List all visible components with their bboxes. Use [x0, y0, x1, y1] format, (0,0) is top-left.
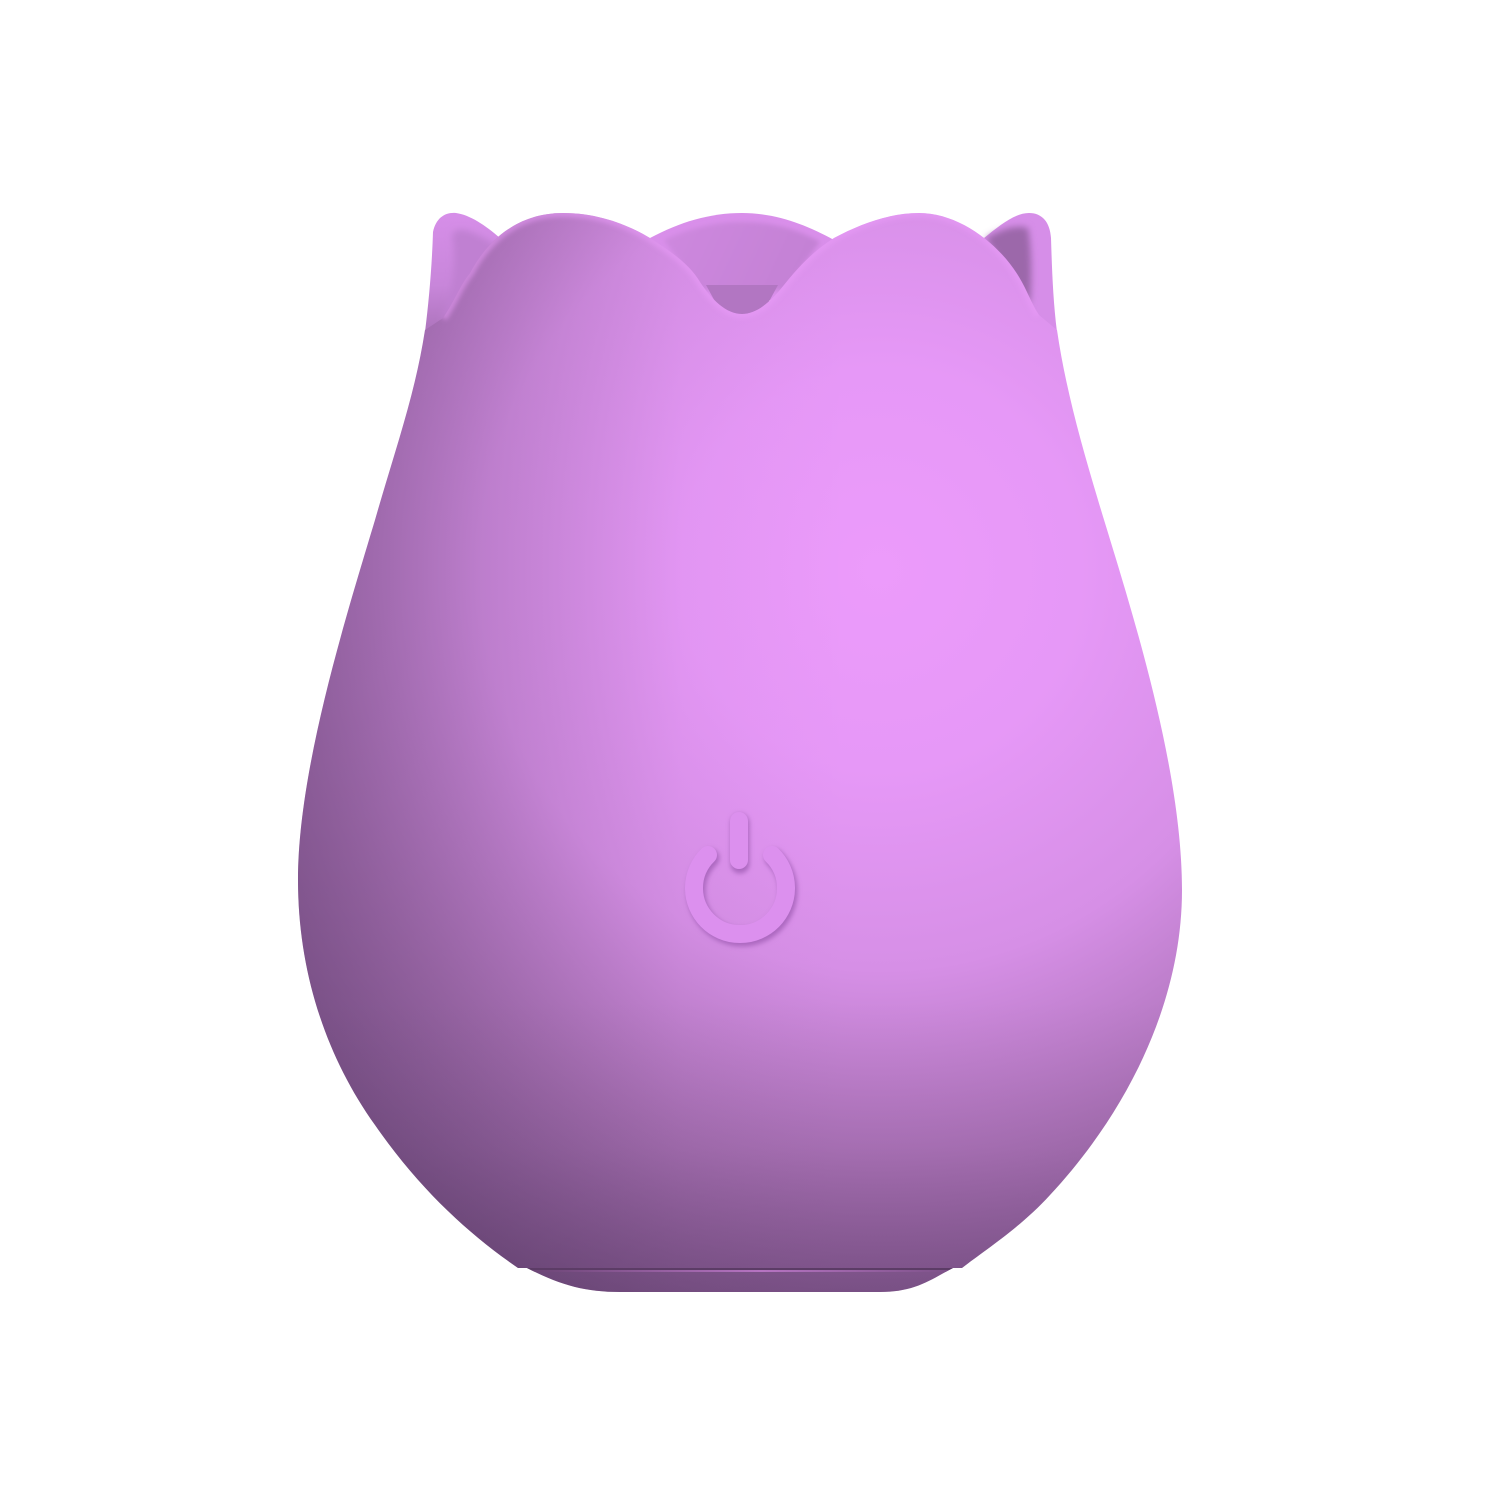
inner ledge: [706, 285, 778, 318]
base seam: [527, 1268, 953, 1270]
back petal: centre: [650, 213, 834, 318]
petal rim highlight: [443, 213, 1039, 318]
back petal: right ear: [984, 213, 1057, 332]
body silhouette: [280, 200, 1200, 1310]
back petal: left ear: [425, 213, 500, 332]
icon: embossed power symbol: [694, 821, 788, 937]
product illustration: purple tulip-shaped device: [298, 212, 1182, 1292]
